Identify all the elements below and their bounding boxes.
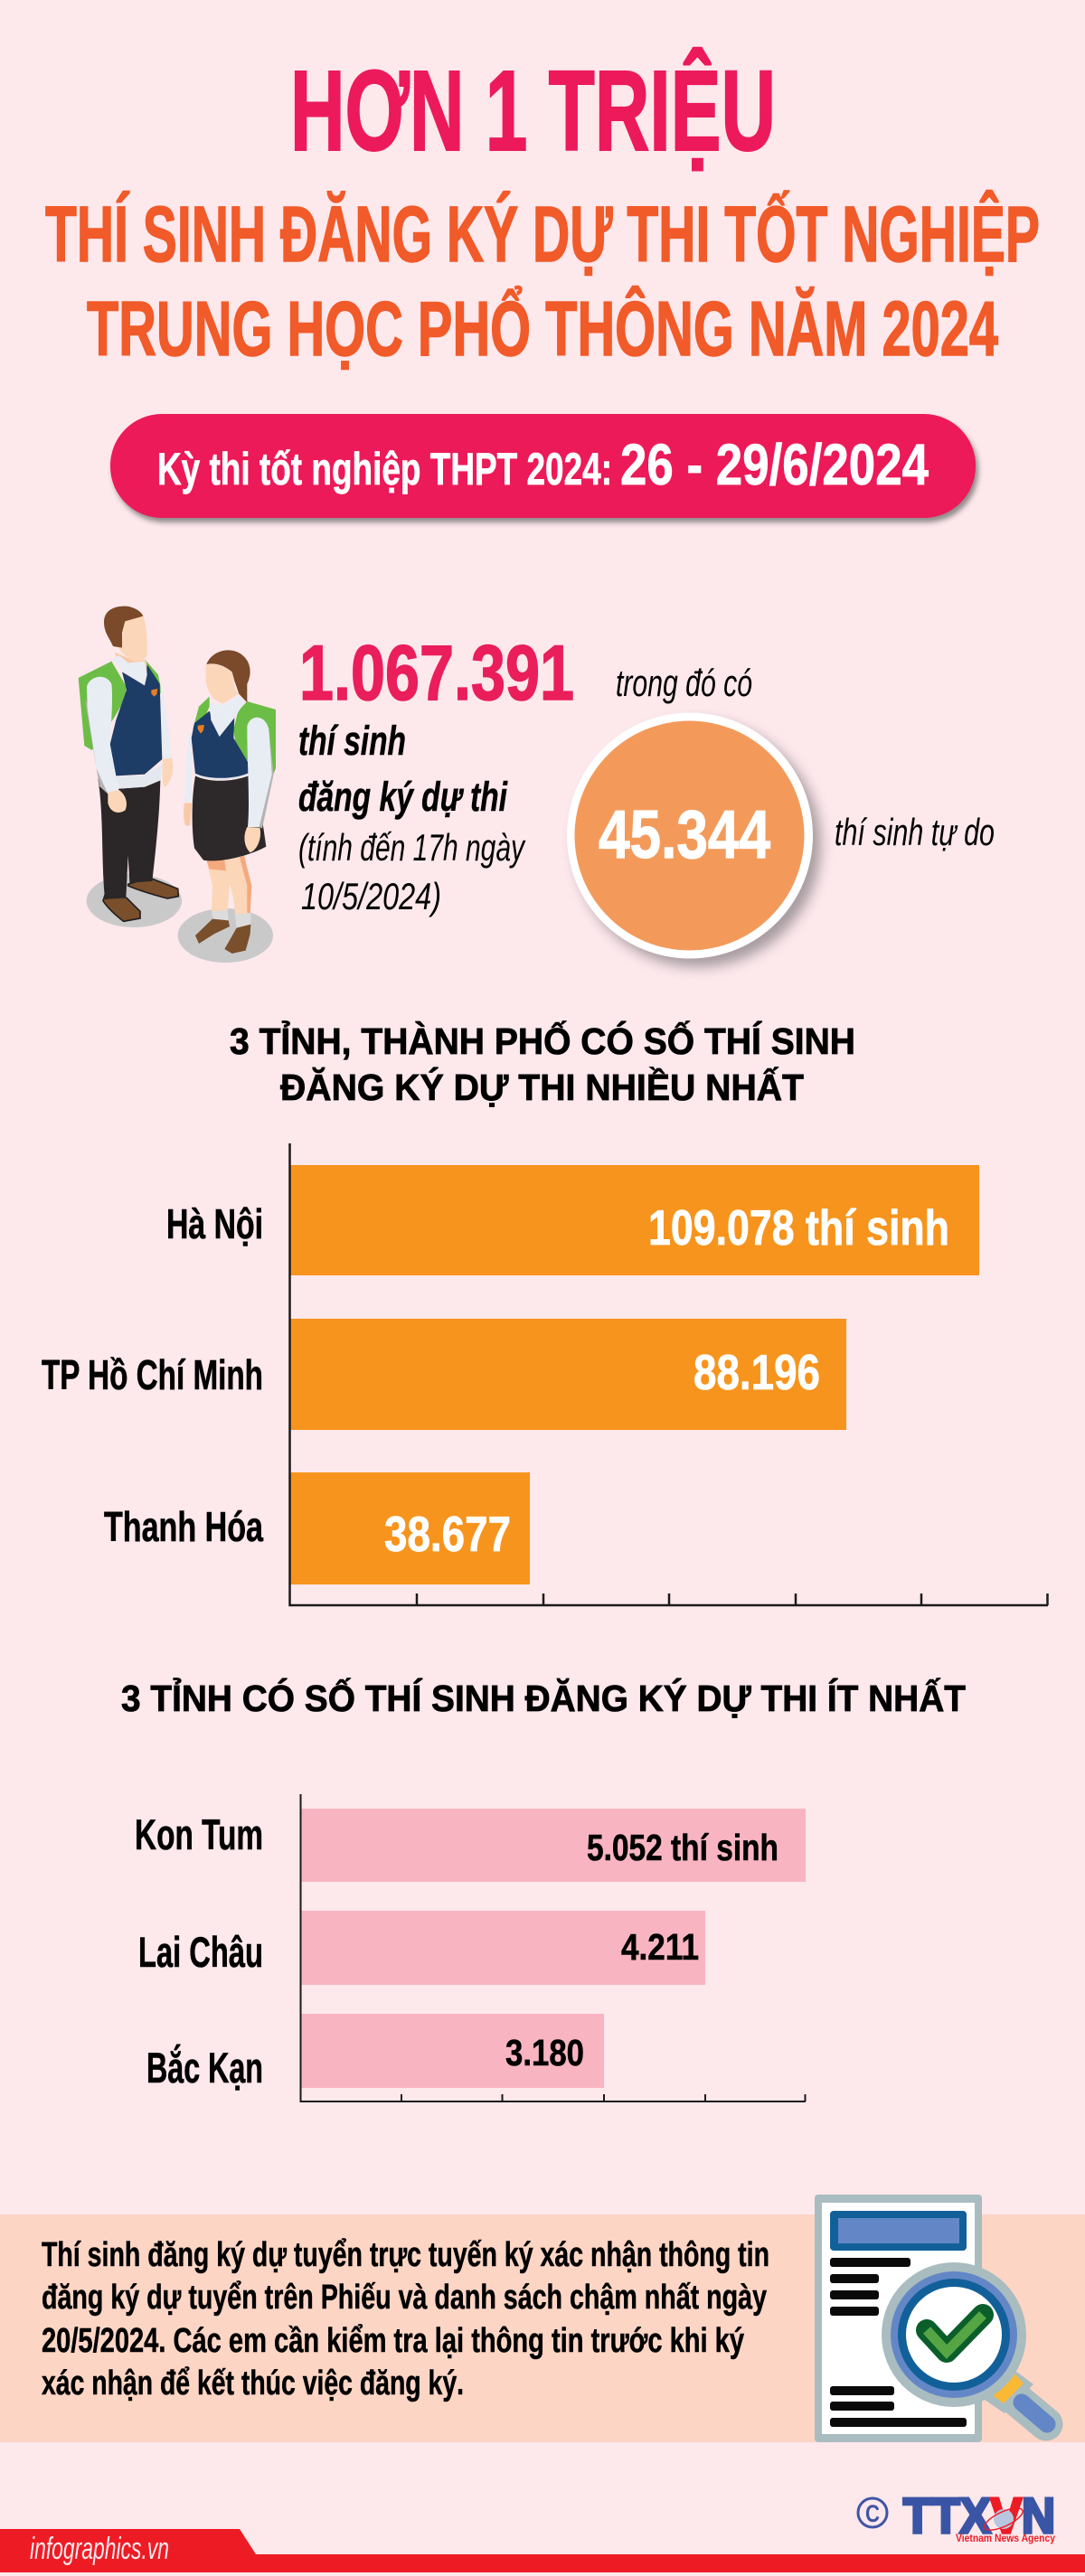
label: Hà Nội: Hà Nội <box>166 1200 263 1247</box>
value: Hà Nội: 109.078 thí sinh <box>648 1199 949 1255</box>
heading: fewest candidates: 3 TỈNH CÓ SỐ THÍ SINH ĐĂNG KÝ DỰ THI ÍT NHẤT <box>121 1678 966 1719</box>
value: Bắc Kạn: 3.180 <box>505 2032 584 2073</box>
label: Thanh Hóa: Thanh Hóa <box>104 1503 263 1550</box>
exam date pill <box>110 414 978 522</box>
panel: registration note <box>0 2214 1085 2442</box>
note text: Thí sinh đăng ký dự tuyển trực tuyến ký xác nhận thông tin <box>42 2236 769 2274</box>
man <box>79 662 127 750</box>
woman <box>193 697 210 729</box>
label: Lai Châu: Lai Châu <box>138 1928 263 1976</box>
pill dates: 26 - 29/6/2024 <box>620 432 929 497</box>
note text <box>42 2236 769 2402</box>
icon: document with magnifying glass and check mark <box>815 2195 1047 2442</box>
label: Kon Tum: Kon Tum <box>135 1810 263 1858</box>
heading: most candidates <box>230 1020 855 1108</box>
heading: most candidates: 3 TỈNH, THÀNH PHỐ CÓ SỐ THÍ SINH <box>230 1020 855 1062</box>
logo: TTXVN copyright mark: TTXVN <box>903 2487 1055 2543</box>
value: Lai Châu: 4.211 <box>621 1926 699 1968</box>
logo: TTXVN copyright mark: C <box>865 2500 880 2527</box>
total candidates caption <box>298 718 526 917</box>
text: trong đó có: trong đó có <box>616 662 752 704</box>
value: Kon Tum: 5.052 thí sinh <box>587 1827 778 1868</box>
bar chart: fewest candidates <box>135 1794 806 2101</box>
note text: 20/5/2024. Các em cần kiểm tra lại thông tin trước khi ký <box>42 2322 744 2360</box>
footer bar <box>0 2529 1085 2572</box>
total candidates caption: đăng ký dự thi <box>298 774 508 820</box>
note text: xác nhận để kết thúc việc đăng ký. <box>42 2364 464 2402</box>
total candidates figure: 1.067.391 <box>299 630 574 717</box>
circle: free candidates <box>567 712 821 967</box>
label: TP Hồ Chí Minh: TP Hồ Chí Minh <box>42 1351 263 1398</box>
title line: HƠN 1 TRIỆU: HƠN 1 TRIỆU <box>290 47 776 174</box>
value: TP Hồ Chí Minh: 88.196 <box>693 1344 820 1400</box>
total candidates caption: thí sinh <box>298 718 406 764</box>
heading: most candidates: ĐĂNG KÝ DỰ THI NHIỀU NHẤT <box>280 1067 804 1108</box>
total candidates caption: (tính đến 17h ngày <box>298 826 526 869</box>
pill label: Kỳ thi tốt nghiệp THPT 2024: <box>157 444 612 494</box>
note text: đăng ký dự tuyển trên Phiếu và danh sách chậm nhất ngày <box>42 2279 767 2317</box>
text: thí sinh tự do: thí sinh tự do <box>835 811 995 853</box>
title <box>45 47 1040 372</box>
illustration: two students with backpacks <box>79 606 276 963</box>
circle: free candidates: 45.344 <box>599 796 770 872</box>
label: Bắc Kạn: Bắc Kạn <box>146 2044 263 2092</box>
value: Thanh Hóa: 38.677 <box>384 1506 511 1562</box>
footer site name: infographics.vn <box>30 2532 169 2566</box>
logo: TTXVN copyright mark: Vietnam News Agency <box>956 2532 1055 2544</box>
total candidates caption: 10/5/2024) <box>301 875 441 917</box>
bar chart: most candidates <box>42 1143 1048 1605</box>
